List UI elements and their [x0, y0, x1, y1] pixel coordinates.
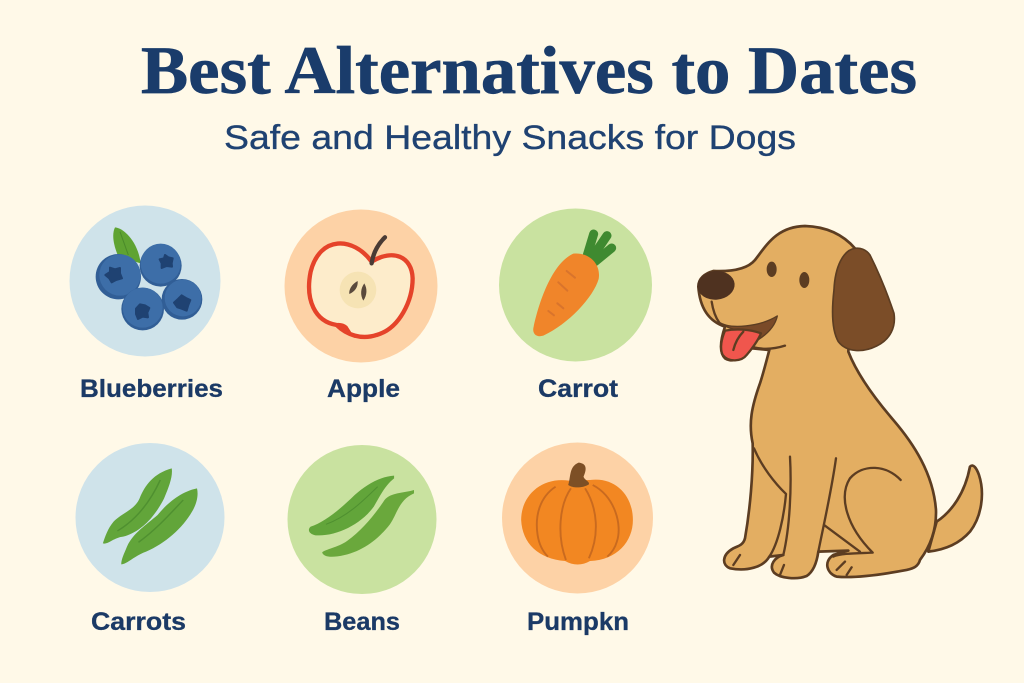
carrot circle	[499, 208, 652, 362]
panel: pumpkin	[502, 442, 653, 636]
icon: apple	[309, 237, 413, 338]
panel: carrot	[499, 208, 652, 403]
panel: carrots	[76, 443, 224, 636]
icon: green beans	[309, 476, 414, 557]
dog ear	[833, 248, 894, 351]
dog tail	[928, 466, 982, 552]
icon: pumpkin	[521, 463, 633, 564]
label: Pumpkn: Pumpkn	[527, 608, 629, 636]
panel: apple	[284, 210, 438, 403]
icon: blueberries	[96, 227, 202, 330]
blueberries circle	[70, 206, 220, 356]
icon: sitting dog	[696, 226, 982, 578]
title: Best Alternatives to Dates	[141, 32, 917, 108]
beans circle	[288, 445, 436, 594]
apple circle	[284, 210, 438, 362]
dog body	[698, 226, 936, 578]
icon: green leaves	[103, 468, 198, 564]
panel: blueberries	[70, 206, 223, 403]
label: Carrot: Carrot	[538, 375, 619, 403]
panel: beans	[288, 445, 436, 636]
pumpkin circle	[502, 442, 653, 594]
dog nose	[696, 269, 736, 301]
dog eyes	[767, 262, 809, 288]
carrots circle	[76, 443, 224, 592]
dog details	[712, 302, 901, 575]
dog tongue	[721, 329, 761, 360]
label: Blueberries: Blueberries	[80, 375, 223, 403]
subtitle: Safe and Healthy Snacks for Dogs	[224, 119, 796, 157]
label: Carrots: Carrots	[91, 608, 186, 636]
icon: carrot	[533, 234, 612, 336]
label: Apple: Apple	[327, 375, 400, 403]
dog mouth	[718, 316, 777, 342]
label: Beans: Beans	[324, 608, 400, 636]
